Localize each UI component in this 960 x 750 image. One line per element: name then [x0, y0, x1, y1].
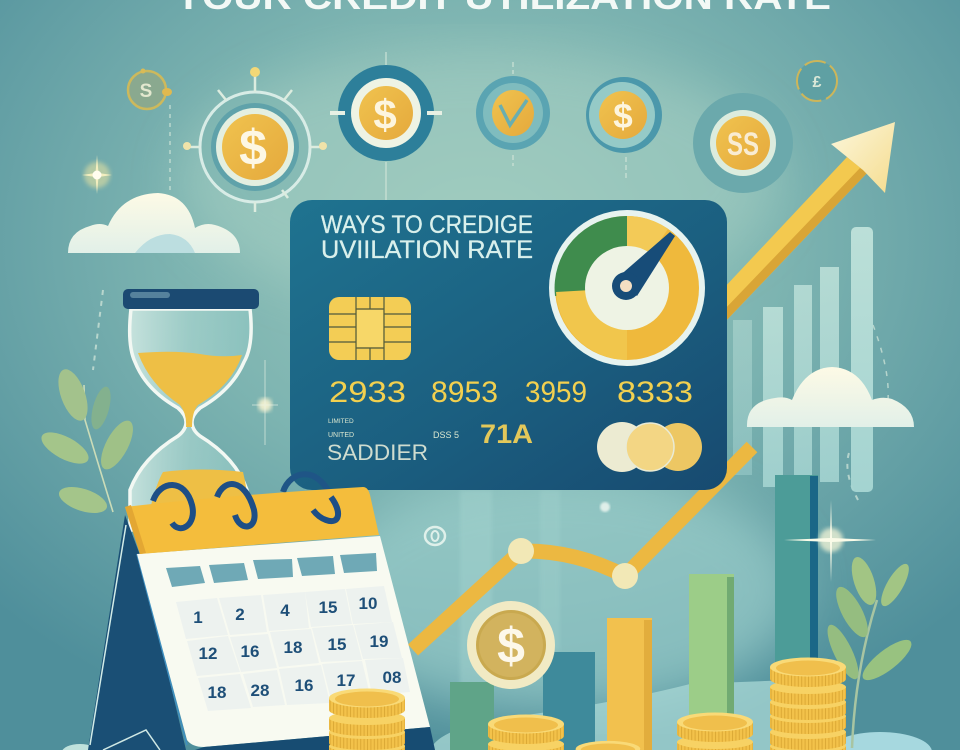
small coin badge: top right [797, 61, 837, 101]
utilization gauge [549, 210, 705, 366]
card chip [329, 297, 411, 360]
calendar numbers: 12 [199, 644, 217, 663]
calendar back rings [283, 474, 331, 497]
dashed connector lines [93, 52, 888, 500]
calendar header [125, 487, 379, 554]
large dollar coin: $ [497, 618, 525, 674]
coin stack: second [488, 714, 564, 750]
coin icon 4 [586, 77, 662, 153]
coin icon 4: $ [613, 97, 633, 136]
small coin badge: top left: S [140, 81, 152, 102]
card small print: LIMITED [328, 418, 354, 425]
sparkle: hourglass [252, 360, 278, 445]
coin icon 5 [693, 93, 793, 193]
trend line [413, 447, 752, 650]
card small print [327, 418, 533, 465]
coin icon 5: SS [727, 126, 759, 162]
sparkle: top left [82, 155, 112, 194]
calendar numbers: 19 [370, 632, 388, 651]
card number: 8953 [431, 376, 498, 409]
calendar numbers: 28 [251, 681, 269, 700]
coin icon 2 [330, 65, 442, 161]
coin stack: calendar [329, 688, 405, 750]
calendar numbers [193, 594, 401, 702]
calendar numbers: 16 [241, 642, 259, 661]
card heading: UVIILATION RATE [321, 236, 533, 264]
rising arrow [722, 122, 895, 325]
coin icon 1 [183, 67, 327, 212]
large dollar coin [467, 601, 555, 689]
card number [329, 376, 693, 409]
calendar numbers: 15 [319, 598, 337, 617]
calendar day cells [176, 586, 410, 711]
coin icon 2: $ [373, 91, 397, 138]
card number: 3959 [525, 376, 587, 409]
calendar numbers: 10 [359, 594, 377, 613]
credit card [290, 200, 727, 490]
coin stack: third [677, 712, 753, 750]
card heading: WAYS TO CREDIGE [321, 211, 533, 239]
calendar numbers: 2 [235, 605, 245, 624]
card small print: 71A [480, 419, 533, 449]
card number: 8333 [617, 376, 693, 409]
hourglass [123, 289, 259, 530]
card logo circles [597, 422, 702, 472]
sparkle: below card [600, 502, 610, 512]
calendar numbers: 16 [295, 676, 313, 695]
small badge: zero [425, 527, 445, 545]
cloud: left [68, 193, 240, 253]
calendar numbers: 08 [383, 668, 401, 687]
plant: left [37, 366, 139, 518]
coin icon 3 [476, 76, 550, 150]
calendar numbers: 15 [328, 635, 346, 654]
calendar rings [153, 484, 338, 528]
coin stack: small front [576, 741, 640, 750]
small coin badge: top left [128, 68, 172, 109]
card small print: UNITED [328, 432, 354, 439]
calendar page [137, 536, 430, 747]
calendar numbers: 17 [337, 671, 355, 690]
cloud: right [747, 367, 914, 427]
calendar numbers: 18 [208, 683, 226, 702]
card small print: SADDIER [327, 440, 428, 465]
sparkle: right [784, 500, 876, 582]
coin stack: tall [770, 658, 846, 750]
coin icon 1: $ [239, 120, 267, 176]
calendar [88, 474, 435, 750]
card heading [321, 211, 533, 264]
card small print: DSS 5 [433, 430, 459, 440]
calendar stand [88, 515, 186, 750]
card number: 2933 [329, 376, 406, 409]
calendar numbers: 18 [284, 638, 302, 657]
calendar numbers: 1 [193, 608, 203, 627]
background bars: right [733, 227, 873, 492]
calendar numbers: 4 [280, 601, 290, 620]
calendar weekday tabs [166, 553, 377, 587]
small coin badge: top right: £ [813, 74, 822, 91]
plant base [828, 732, 932, 750]
plant: right [822, 554, 917, 748]
bar chart [450, 475, 818, 750]
